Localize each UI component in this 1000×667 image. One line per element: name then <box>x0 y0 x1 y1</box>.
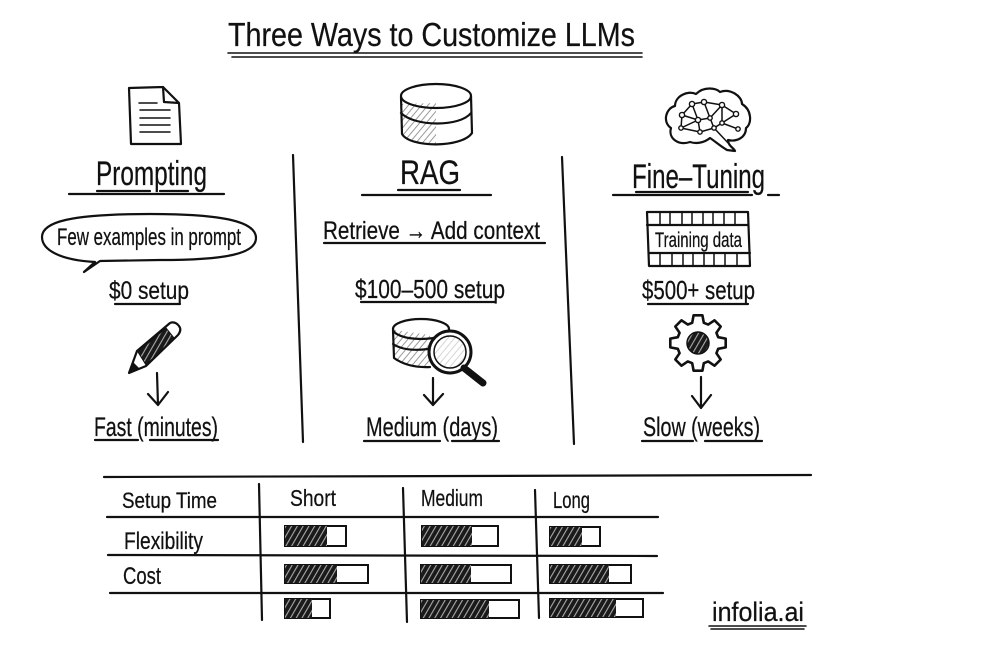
bar: row 2 medium <box>421 565 511 583</box>
divider: left <box>293 155 303 442</box>
title: Three Ways to Customize LLMs <box>228 16 635 53</box>
brand: infolia.ai: infolia.ai <box>712 597 804 627</box>
heading: Fine-Tuning: Fine–Tuning <box>632 158 765 196</box>
cost: $0 setup: $0 setup <box>109 277 189 305</box>
comparison table <box>104 475 811 622</box>
icon: document <box>129 87 181 144</box>
callout: few examples <box>42 214 256 272</box>
arrow: fine-tuning down <box>692 377 711 408</box>
icon: database with magnifier <box>393 319 483 383</box>
heading: Prompting <box>69 155 224 194</box>
bar: row 3 long <box>550 599 643 617</box>
box: training data <box>647 212 750 266</box>
speed: medium: Medium (days) <box>366 412 498 442</box>
column header: medium: Medium <box>421 485 483 511</box>
bar: row 2 long <box>550 565 631 583</box>
icon: pencil <box>129 322 180 373</box>
speed: fast: Fast (minutes) <box>94 412 218 442</box>
box: training data: Training data <box>655 229 742 252</box>
panel: fine-tuning <box>613 88 779 442</box>
cost: $500+ setup: $500+ setup <box>642 275 755 305</box>
text: retrieve add context: Retrieve → Add context <box>323 217 540 245</box>
bar: row 1 short <box>285 526 346 546</box>
speed: slow: Slow (weeks) <box>643 412 760 442</box>
bar: row 3 medium <box>421 600 519 618</box>
heading: RAG: RAG <box>400 154 460 192</box>
panel: prompting <box>42 87 256 442</box>
row header: setup time: Setup Time <box>122 488 217 513</box>
cost: $100-500 setup: $100–500 setup <box>355 274 505 304</box>
row header: cost: Cost <box>123 563 161 590</box>
bar: row 3 short <box>285 599 330 618</box>
row header: flexibility: Flexibility <box>124 528 203 555</box>
divider: right <box>562 157 574 444</box>
bar: row 1 medium <box>422 526 498 546</box>
heading: Prompting: Prompting <box>96 155 207 193</box>
arrow: rag down <box>424 378 443 405</box>
icon: brain <box>666 88 750 151</box>
callout: few examples: Few examples in prompt <box>57 224 241 251</box>
column header: short: Short <box>290 485 337 511</box>
panel: rag <box>323 84 545 442</box>
icon: database <box>401 84 472 144</box>
icon: gear <box>670 315 726 371</box>
bar: row 2 short <box>285 565 368 583</box>
heading: RAG <box>362 154 491 195</box>
arrow: prompting down <box>148 373 168 405</box>
column header: long: Long <box>553 487 590 513</box>
bar: row 1 long <box>550 527 600 546</box>
